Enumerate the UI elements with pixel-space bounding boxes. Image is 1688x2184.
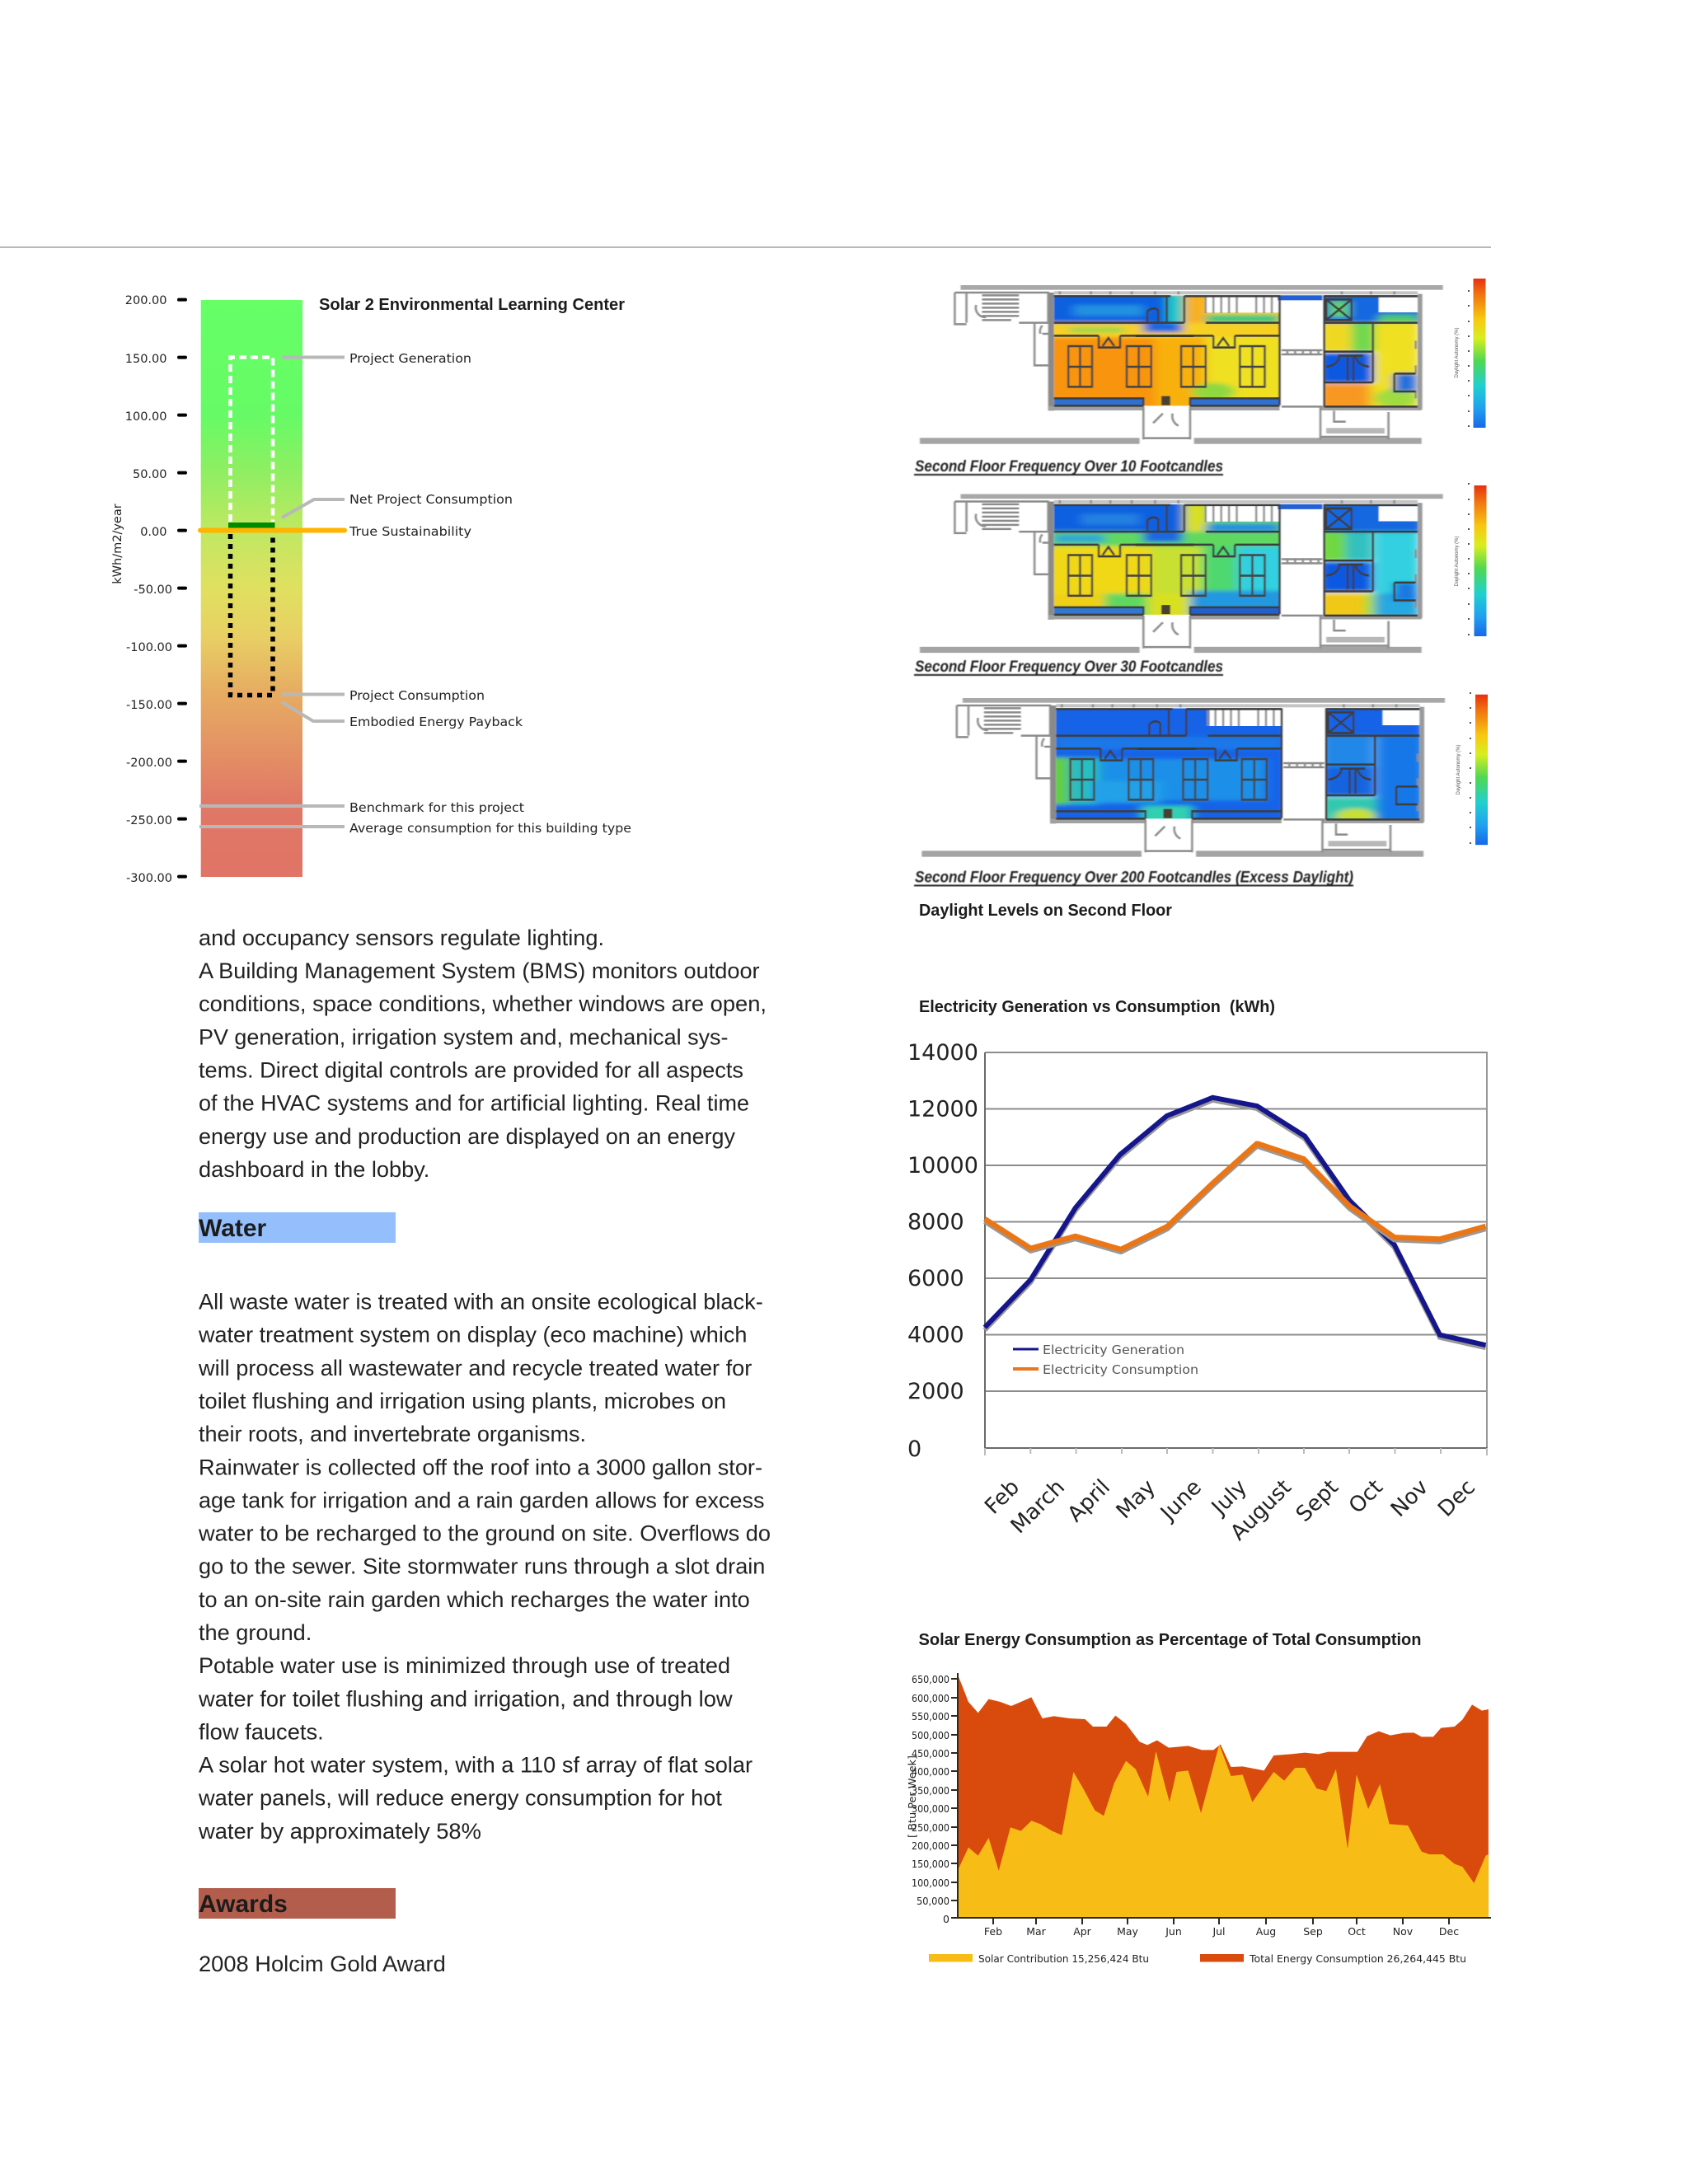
y axis tick marks [179,300,185,877]
y axis labels: 0 [907,1436,921,1462]
y axis labels: 2000 [907,1379,964,1404]
month labels: June [1155,1475,1207,1526]
month labels: Dec [1433,1475,1480,1522]
y axis labels: 10000 [907,1153,978,1179]
y axis tick labels [125,294,172,885]
y axis tick labels: -100.00 [126,641,172,654]
legend: Total Energy Consumption 26,264,445 Btu [1249,1952,1466,1965]
colour scale 1: Daylight Autonomy (%) [1455,327,1460,378]
y axis labels: 100,000 [912,1877,950,1889]
y axis tick labels: -200.00 [126,757,172,770]
y axis labels: 0 [943,1913,950,1925]
heat map [1055,708,1421,819]
meter labels: Project Generation [349,351,471,366]
y axis labels [907,1040,978,1462]
x axis labels: Dec [1439,1925,1459,1938]
caption 2: Second Floor Frequency Over 30 Footcandles [915,658,1223,676]
x axis labels: May [1117,1925,1139,1938]
y axis labels: 600,000 [912,1692,950,1704]
text block: water: flow faucets. [199,1719,324,1744]
y axis labels: 550,000 [912,1710,950,1722]
y axis labels: 6000 [907,1266,964,1291]
text block: water: will process all wastewater and recycle treated water for [198,1356,752,1380]
text block: energy continued: tems. Direct digital controls are provided for all aspects [199,1058,743,1083]
floor plan: over 200 footcandles [921,698,1445,857]
y axis tick labels: -150.00 [126,699,172,712]
areas [958,1675,1489,1918]
text block: water: the ground. [199,1620,312,1645]
true sustainability line [200,527,345,532]
x axis labels [984,1925,1459,1938]
x axis labels: Nov [1393,1925,1414,1938]
y axis labels: 250,000 [912,1821,950,1834]
text block: energy continued: of the HVAC systems and for artificial lighting. Real time [199,1091,749,1116]
legend: Electricity Generation [1043,1343,1184,1357]
meter labels: Average consumption for this building type [349,821,631,836]
text block: energy continued: and occupancy sensors regulate lighting. [199,926,604,950]
y axis labels: 450,000 [912,1747,950,1760]
month labels: March [1006,1475,1070,1539]
caption 1: Second Floor Frequency Over 10 Footcandles [915,458,1223,476]
x axis labels: Mar [1026,1925,1047,1938]
text block: water: Potable water use is minimized through use of treated [199,1653,730,1678]
text block: water: water treatment system on display (eco machine) which [198,1323,747,1347]
legend [1013,1343,1198,1377]
colour scale 3 [1456,693,1488,845]
y axis labels [912,1673,950,1925]
y axis tick labels: 0.00 [140,526,166,539]
text block: water: water panels, will reduce energy consumption for hot [198,1786,722,1811]
text block: energy continued: dashboard in the lobby. [199,1157,429,1182]
meter labels: Project Consumption [349,688,485,703]
heading: solar chart: Solar Energy Consumption as Percentage of Total Consumption [918,1631,1421,1649]
text block: energy continued: energy use and production are displayed on an energy [199,1124,735,1149]
heat map [1053,504,1418,615]
heading: awards: Awards [199,1891,288,1918]
heading: water [199,1212,396,1243]
text block: water: All waste water is treated with an onsite ecological black- [199,1289,763,1314]
chart: energy balance meter [111,294,631,885]
y axis labels: 12000 [907,1096,978,1122]
project consumption dashed box [231,534,273,696]
month labels: August [1226,1475,1296,1545]
text block: water: water for toilet flushing and irrigation, and through low [198,1686,733,1711]
text block: water: their roots, and invertebrate organisms. [199,1422,586,1446]
month labels [980,1475,1480,1545]
y axis tick labels: 100.00 [125,410,166,424]
month labels: Nov [1386,1475,1433,1522]
consumption line [985,1143,1486,1252]
floor plan: over 30 footcandles [920,494,1443,653]
y axis labels: 8000 [907,1210,964,1235]
text block: energy continued: PV generation, irrigation system and, mechanical sys- [199,1024,729,1049]
text block: water: toilet flushing and irrigation using plants, microbes on [199,1389,726,1413]
caption 3: Second Floor Frequency Over 200 Footcandles (Excess Daylight) [915,869,1353,887]
month labels: May [1112,1475,1160,1524]
y axis title: kWh/m2/year [111,504,124,584]
month labels: April [1063,1475,1115,1527]
text block: energy continued: conditions, space conditions, whether windows are open, [199,991,767,1016]
y axis tick labels: 150.00 [125,353,166,366]
y axis labels: 200,000 [912,1840,950,1852]
x axis labels: Oct [1348,1925,1366,1938]
y axis labels: 150,000 [912,1858,950,1870]
heading: awards [199,1888,396,1919]
grid and frame [985,1052,1488,1455]
legend: Solar Contribution 15,256,424 Btu [978,1952,1149,1965]
text block: water: water to be recharged to the ground on site. Overflows do [198,1521,771,1546]
x axis labels: Sep [1303,1925,1323,1938]
text block: awards: 2008 Holcim Gold Award [199,1952,446,1976]
blue strip between wings [1278,295,1322,300]
text block: water: to an on-site rain garden which recharges the water into [199,1587,750,1612]
meter labels: Benchmark for this project [349,800,524,815]
generation line [985,1098,1486,1347]
x axis labels: Jul [1212,1925,1226,1938]
y axis labels: 500,000 [912,1729,950,1741]
text block: water: A solar hot water system, with a 110 sf array of flat solar [199,1753,753,1778]
meter labels [349,351,631,836]
net project consumption bar [228,523,275,529]
top rule [0,246,1491,248]
month labels: Oct [1344,1475,1388,1519]
heading: daylight levels: Daylight Levels on Second Floor [919,902,1172,920]
y axis labels: 300,000 [912,1802,950,1815]
text block: energy continued [199,926,767,1182]
window bays [1053,608,1144,614]
meter title: Solar 2 Environmental Learning Center [319,296,625,314]
y axis labels: 350,000 [912,1784,950,1797]
y axis labels: 650,000 [912,1673,950,1685]
window bays [1053,399,1144,405]
month labels: Feb [980,1475,1025,1520]
colour scale 2: Daylight Autonomy (%) [1455,536,1460,587]
floor plan: over 10 footcandles [920,285,1443,444]
meter labels: Embodied Energy Payback [349,715,523,729]
solar contribution area [958,1745,1489,1918]
month labels: Sept [1292,1475,1343,1527]
white stair wells [1210,709,1282,726]
y axis labels: 50,000 [917,1895,950,1907]
area chart: solar contribution vs total consumption [906,1673,1491,1965]
text block: water: age tank for irrigation and a rain garden allows for excess [199,1488,765,1512]
colour scale 1 [1455,279,1485,428]
y axis tick labels: 50.00 [133,468,166,481]
y axis labels: 14000 [907,1040,978,1066]
y axis labels: 400,000 [912,1765,950,1778]
colour scale 3: Daylight Autonomy (%) [1456,744,1461,795]
meter labels: Net Project Consumption [349,492,513,507]
heading: water: Water [199,1215,267,1242]
x axis labels: Aug [1256,1925,1276,1938]
plan walls [920,494,1443,653]
meter labels: True Sustainability [349,524,471,539]
text block: water: water by approximately 58% [198,1819,481,1844]
y axis tick labels: -300.00 [126,872,172,885]
colour scale 2 [1455,484,1487,636]
text block: water: Rainwater is collected off the roof into a 3000 gallon stor- [199,1455,762,1479]
y axis tick labels: -250.00 [126,814,172,827]
text block: energy continued: A Building Management System (BMS) monitors outdoor [199,958,760,983]
blue strip between wings [1278,504,1322,509]
x axis labels: Feb [984,1925,1002,1938]
legend [929,1952,1466,1965]
plan walls [920,285,1443,444]
line chart: electricity generation vs consumption [907,1040,1488,1545]
heat map [1053,295,1418,405]
x axis labels: Jun [1165,1925,1182,1938]
leader lines [199,358,345,827]
y axis tick labels: 200.00 [125,294,166,307]
month labels: July [1206,1475,1252,1521]
heading: electricity chart: Electricity Generation vs Consumption (kWh) [919,998,1275,1016]
x axis labels: Apr [1073,1925,1092,1938]
plan walls [921,698,1445,857]
text block: water: go to the sewer. Site stormwater runs through a slot drain [199,1554,765,1579]
axes and ticks [951,1673,1491,1924]
y axis tick labels: -50.00 [134,583,172,597]
legend: Electricity Consumption [1043,1362,1198,1377]
project generation dashed box [231,358,273,522]
meter gradient bar [201,300,302,877]
total consumption area [958,1675,1489,1918]
y axis title: [ Btu Per Week] [906,1755,918,1838]
y axis labels: 4000 [907,1322,964,1348]
text block: water [198,1289,771,1844]
